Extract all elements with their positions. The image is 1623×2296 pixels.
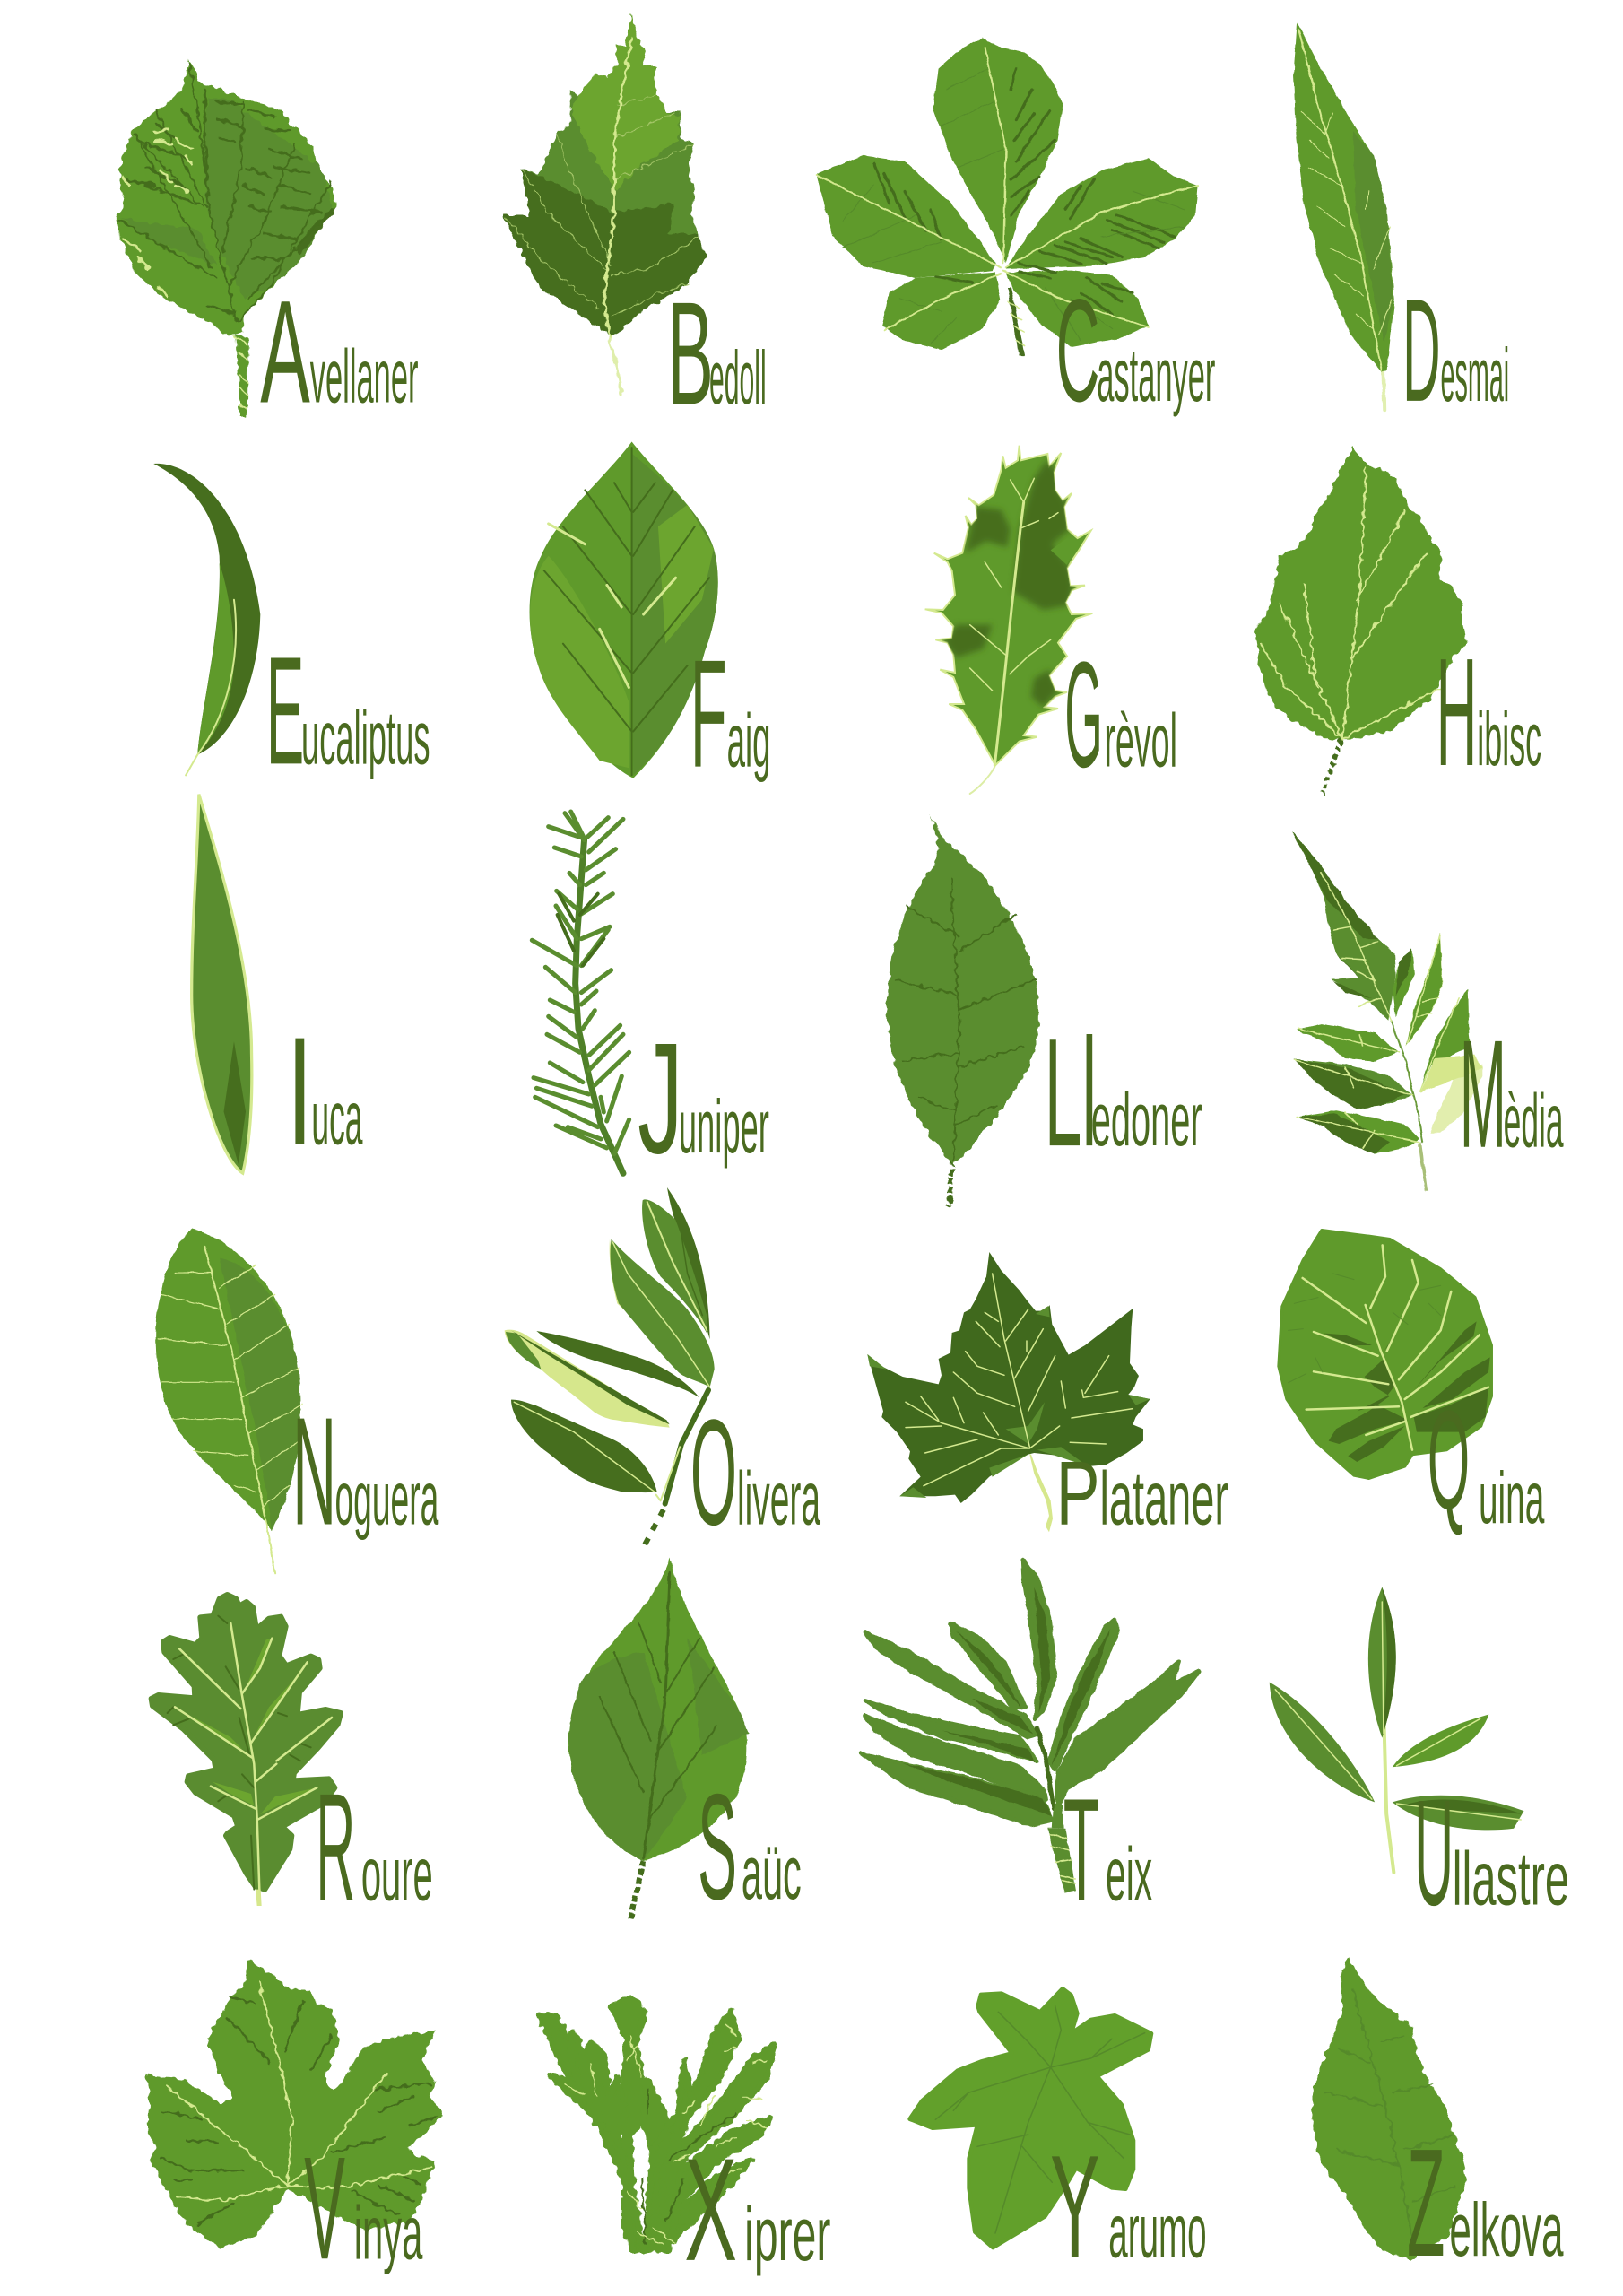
icon: quince leaf	[1279, 1231, 1491, 1478]
label: Vinya: V	[304, 2126, 345, 2290]
label: Plataner: lataner	[1100, 1456, 1228, 1541]
text: uina	[1479, 1457, 1545, 1539]
panel: G Grèvol	[925, 446, 1177, 799]
panel: V Vinya: inya	[354, 2189, 423, 2274]
panel: R Roure	[152, 1595, 433, 1934]
panel: T Teix: eix	[1106, 1831, 1152, 1917]
label: Zelkova: Z	[1407, 2118, 1445, 2289]
label: Zelkova	[1407, 2118, 1564, 2289]
text: edoll	[709, 335, 767, 420]
icon: yew branch	[862, 1560, 1199, 1893]
label: Iuca: I	[287, 1005, 313, 1177]
label: Yarumo: Y	[1050, 2125, 1100, 2289]
panel: A Avellaner	[117, 60, 418, 434]
icon: cypress branch	[539, 1996, 775, 2251]
icon: vine leaf	[145, 1960, 443, 2248]
label: Bedoll: B	[667, 271, 714, 435]
panel: P Plataner	[867, 1252, 1228, 1544]
label: Grèvol: G	[1064, 631, 1103, 799]
label: Avellaner	[260, 270, 418, 434]
label: Hibisc: H	[1436, 627, 1477, 798]
icon: holly leaf	[925, 446, 1092, 794]
label: Mèdia: M	[1460, 1009, 1506, 1180]
panel: Ll Lledoner	[888, 814, 1202, 1207]
text: arumo	[1108, 2188, 1207, 2274]
label: Roure: R	[316, 1762, 355, 1934]
label: Xiprer: iprer	[744, 2191, 830, 2276]
panel: T Teix	[862, 1560, 1199, 1932]
label: Yarumo	[1050, 2125, 1207, 2289]
panel: E Eucaliptus	[153, 464, 430, 796]
icon: yucca leaf	[192, 795, 252, 1173]
panel: Z Zelkova	[1312, 1957, 1564, 2289]
icon: birch leaf	[503, 14, 706, 395]
text: oguera	[334, 1456, 439, 1541]
panel: Y Yarumo	[910, 1988, 1207, 2289]
label: Plataner: P	[1056, 1443, 1100, 1544]
label: Avellaner: A	[260, 270, 310, 434]
panel: X Xiprer	[539, 1996, 830, 2292]
text: rèvol	[1104, 698, 1177, 783]
panel: B Bedoll	[503, 14, 767, 435]
text: uca	[311, 1074, 363, 1160]
panel: F Faig	[530, 442, 771, 800]
icon: juniper sprig	[532, 812, 629, 1173]
label: Xiprer	[684, 2127, 830, 2292]
icon: zelkova leaf	[1312, 1957, 1467, 2260]
icon: yarumo leaf	[910, 1988, 1151, 2248]
icon: hazel leaf	[117, 60, 337, 417]
panel: S Saüc	[568, 1558, 802, 1931]
icon: elder leaf	[568, 1558, 749, 1919]
icon: eucalyptus leaf	[153, 464, 260, 775]
label: Juniper	[638, 1011, 769, 1187]
label: Castanyer: C	[1056, 268, 1100, 432]
label: Olivera: O	[690, 1388, 737, 1557]
label: Juniper: J	[638, 1011, 683, 1187]
text: vellaner	[310, 334, 418, 419]
panel: O Olivera	[505, 1187, 820, 1557]
icon: plane tree leaf	[867, 1252, 1150, 1532]
label: Teix: T	[1063, 1768, 1100, 1932]
panel: D Desmai	[1294, 22, 1509, 432]
text: edoner	[1091, 1076, 1202, 1161]
panel: I Iuca	[192, 795, 363, 1177]
icon: hibiscus leaf	[1254, 446, 1467, 795]
icon: compound media leaf	[1292, 831, 1482, 1191]
text: astanyer	[1097, 332, 1215, 417]
text: aig	[727, 698, 771, 783]
icon: wild olive sprig	[1270, 1587, 1524, 1873]
label: Iuca	[287, 1005, 363, 1177]
label: Lledoner: Ll	[1045, 1007, 1097, 1178]
label: Saüc: S	[698, 1762, 737, 1931]
icon: walnut leaf	[156, 1229, 303, 1572]
icon: chestnut leaf	[817, 38, 1198, 356]
panel: H Hibisc	[1254, 446, 1541, 798]
label: Ullastre: U	[1414, 1769, 1454, 1937]
label: Faig: F	[690, 629, 727, 800]
label: Xiprer: X	[684, 2127, 737, 2292]
text: uniper	[679, 1083, 769, 1169]
label: Desmai: D	[1402, 268, 1441, 432]
icon: oak leaf	[152, 1595, 341, 1906]
panel: C Castanyer	[817, 38, 1215, 432]
label: Quina: Q	[1428, 1382, 1470, 1539]
label: Eucaliptus	[266, 625, 430, 796]
icon: willow leaf	[1294, 22, 1394, 410]
text: livera	[737, 1456, 820, 1541]
panel: J Juniper	[532, 812, 769, 1187]
text: ucaliptus	[301, 694, 430, 779]
label: Castanyer	[1056, 268, 1215, 432]
icon: hackberry leaf	[888, 814, 1038, 1207]
panel: Q Quina	[1279, 1231, 1545, 1539]
panel: V Vinya	[145, 1960, 443, 2290]
text: aüc	[742, 1830, 802, 1915]
text: oure	[361, 1831, 433, 1917]
label: Eucaliptus: E	[266, 625, 304, 796]
label: Plataner	[1056, 1443, 1228, 1544]
label: Noguera: N	[292, 1387, 336, 1558]
panel: M Mèdia	[1292, 831, 1564, 1191]
panel: N Noguera	[156, 1229, 439, 1572]
panel: U Ullastre	[1270, 1587, 1569, 1937]
icon: beech leaf	[530, 442, 718, 778]
icon: olive branch	[505, 1187, 715, 1552]
